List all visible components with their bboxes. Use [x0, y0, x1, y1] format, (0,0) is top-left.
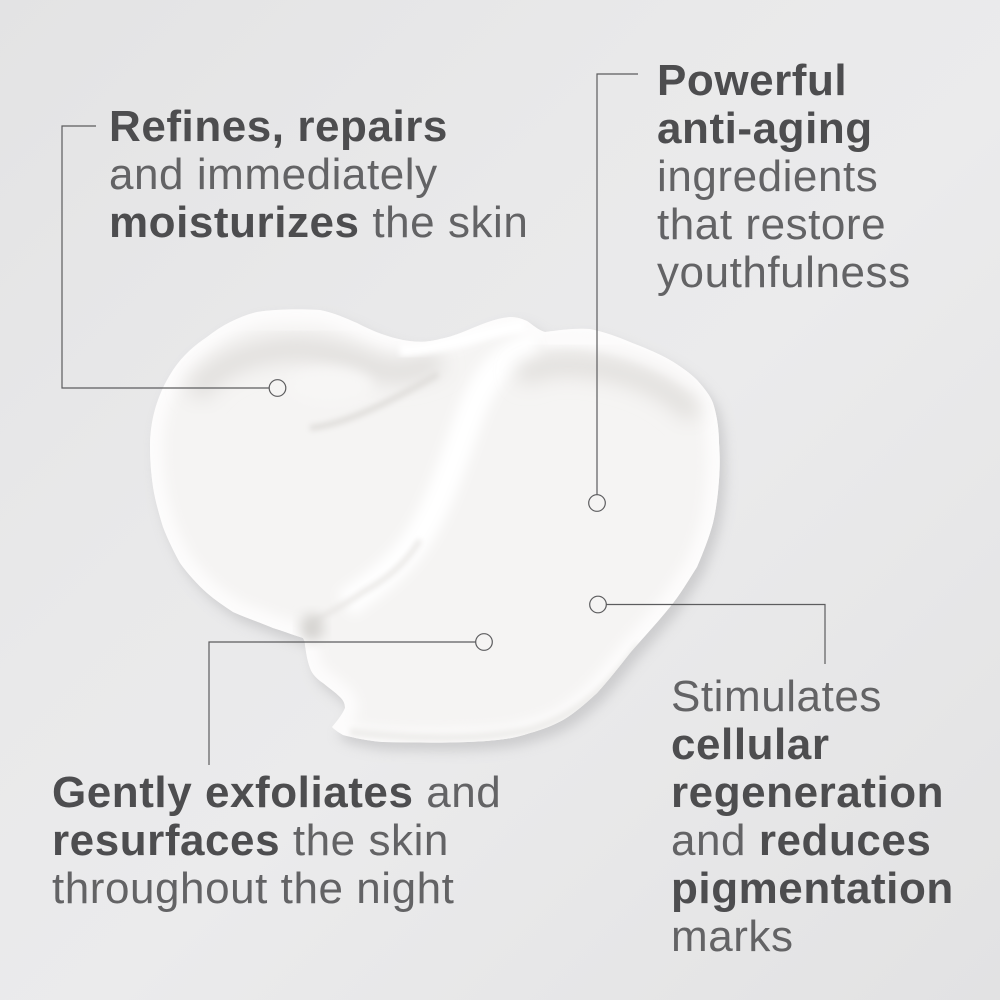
sweep dark edge	[325, 540, 422, 616]
text: gently exfoliates: throughout the night	[52, 864, 454, 913]
text: stimulates regeneration: Stimulates	[671, 672, 882, 721]
text: gently exfoliates	[52, 768, 501, 913]
rim highlight	[150, 309, 720, 743]
text: powerful anti-aging: ingredients	[657, 152, 878, 201]
sweep white band	[345, 345, 538, 605]
text: stimulates regeneration: and reduces	[671, 816, 931, 865]
text: refines, repairs: and immediately	[109, 150, 438, 199]
top band highlights	[402, 345, 442, 356]
text: powerful anti-aging: youthfulness	[657, 248, 911, 297]
text: stimulates regeneration: regeneration	[671, 768, 944, 817]
callout line: anti-aging	[589, 74, 638, 511]
text: stimulates regeneration: marks	[671, 912, 794, 961]
callout line: refines	[62, 126, 286, 396]
text: gently exfoliates: Gently exfoliates and	[52, 768, 501, 817]
text: refines, repairs	[109, 102, 528, 247]
lower streak	[310, 374, 438, 428]
callout line: regeneration	[590, 596, 825, 664]
text: powerful anti-aging: that restore	[657, 200, 886, 249]
text: stimulates regeneration	[671, 672, 954, 961]
upper left shaded fold	[195, 349, 440, 395]
bright patch	[288, 368, 372, 404]
cream swatch	[140, 300, 730, 760]
callout line: exfoliates	[209, 634, 492, 765]
cream shadow	[156, 317, 726, 751]
text: powerful anti-aging: anti-aging	[657, 104, 873, 153]
text: stimulates regeneration: pigmentation	[671, 864, 954, 913]
cream swatch with callout lines	[61, 73, 826, 765]
text: powerful anti-aging	[657, 56, 911, 297]
text: gently exfoliates: resurfaces the skin	[52, 816, 449, 865]
right arc shade	[520, 365, 695, 415]
pinch shadow	[300, 614, 324, 642]
text: refines, repairs: Refines, repairs	[109, 102, 448, 151]
text: stimulates regeneration: cellular	[671, 720, 830, 769]
lower rim shade	[350, 645, 640, 738]
text: refines, repairs: moisturizes the skin	[109, 198, 528, 247]
text: powerful anti-aging: Powerful	[657, 56, 847, 105]
